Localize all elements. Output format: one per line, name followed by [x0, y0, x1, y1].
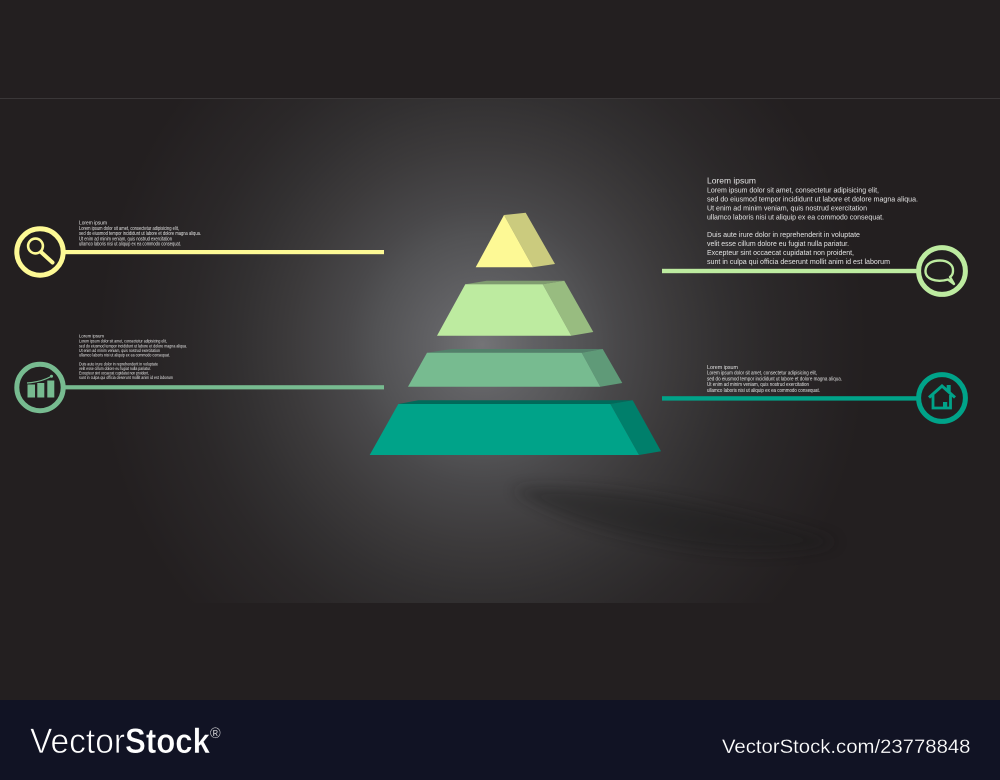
connector line: yellow [64, 250, 384, 254]
callout: top right, light green [662, 176, 965, 294]
callout: lower left, green [17, 334, 384, 411]
connector line: light green [662, 269, 918, 273]
connector line: green [64, 385, 384, 389]
footer logo [30, 722, 221, 761]
text block: lower left: Lorem ipsum dolor sit amet, consectetur adipisicing elit, [79, 339, 167, 344]
text block: top right: Lorem ipsum dolor sit amet, consectetur adipisicing elit, [707, 185, 879, 194]
callout: lower right, teal [662, 365, 965, 421]
text block: top left: Ut enim ad minim veniam, quis nostrud exercitation [79, 236, 172, 242]
icon: house [919, 375, 965, 421]
text block: lower right: Ut enim ad minim veniam, quis nostrud exercitation [707, 382, 809, 388]
footer image id: VectorStock.com/23778848 [722, 736, 970, 758]
icon: magnifier [17, 229, 63, 275]
pyramid tier 2: light green [437, 281, 593, 336]
text block: lower left: Lorem ipsum [79, 334, 104, 339]
pyramid tier 1: yellow [476, 213, 555, 267]
text block: lower right [707, 365, 842, 394]
text block: lower left: sunt in culpa qui officia deserunt mollit anim id est laborum [79, 375, 173, 380]
text block: top right: sed do eiusmod tempor incididunt ut labore et dolore magna aliqua. [707, 194, 918, 203]
connector line: teal [662, 396, 918, 401]
footer logo: Stock [125, 722, 210, 761]
pyramid tier 3: mid green [408, 349, 622, 387]
text block: top left [79, 221, 201, 247]
text block: lower left: sed do eiusmod tempor incididunt ut labore et dolore magna aliqua. [79, 344, 187, 348]
bottom band [0, 603, 1000, 700]
icon: speech bubble [919, 248, 965, 294]
text block: top right: sunt in culpa qui officia deserunt mollit anim id est laborum [707, 257, 890, 266]
text block: top left: Lorem ipsum [79, 221, 107, 227]
top band [0, 0, 1000, 98]
text block: top right: Excepteur sint occaecat cupidatat non proident, [707, 248, 854, 257]
text block: top left: Lorem ipsum dolor sit amet, consectetur adipisicing elit, [79, 226, 179, 232]
text block: lower left: Ut enim ad minim veniam, quis nostrud exercitation [79, 348, 160, 353]
text block: top left: ullamco laboris nisi ut aliquip ex ea commodo consequat. [79, 241, 181, 247]
footer bar [0, 700, 1000, 780]
footer logo: Vector [30, 722, 125, 761]
text block: top right [707, 176, 918, 266]
pyramid shadow [512, 487, 838, 552]
text block: lower left: ullamco laboris nisi ut aliquip ex ea commodo consequat. [79, 353, 170, 358]
callout: top left, yellow [17, 221, 384, 275]
text block: lower right: sed do eiusmod tempor incididunt ut labore et dolore magna aliqua. [707, 376, 842, 382]
pyramid [370, 213, 661, 455]
pyramid tier 4: teal [370, 400, 661, 455]
text block: lower left: velit esse cillum dolore eu fugiat nulla pariatur. [79, 366, 151, 371]
icon: bar chart [17, 364, 63, 411]
text block: lower right: ullamco laboris nisi ut aliquip ex ea commodo consequat. [707, 388, 820, 394]
text block: top right: Duis aute irure dolor in reprehenderit in voluptate [707, 230, 860, 239]
text block: lower right: Lorem ipsum [707, 365, 738, 371]
text block: top left: sed do eiusmod tempor incididunt ut labore et dolore magna aliqua. [79, 231, 201, 237]
text block: lower left [79, 334, 187, 380]
text block: top right: Ut enim ad minim veniam, quis nostrud exercitation [707, 203, 867, 212]
text block: lower right: Lorem ipsum dolor sit amet, consectetur adipisicing elit, [707, 371, 817, 377]
text block: lower left: Excepteur sint occaecat cupidatat non proident, [79, 371, 149, 376]
footer logo: ® [210, 726, 221, 742]
text block: top right: ullamco laboris nisi ut aliquip ex ea commodo consequat. [707, 212, 884, 221]
text block: top right: velit esse cillum dolore eu fugiat nulla pariatur. [707, 239, 849, 248]
text block: lower left: Duis aute irure dolor in reprehenderit in voluptate [79, 362, 158, 367]
central panel with radial glow [0, 98, 1000, 603]
text block: top right: Lorem ipsum [707, 176, 756, 186]
